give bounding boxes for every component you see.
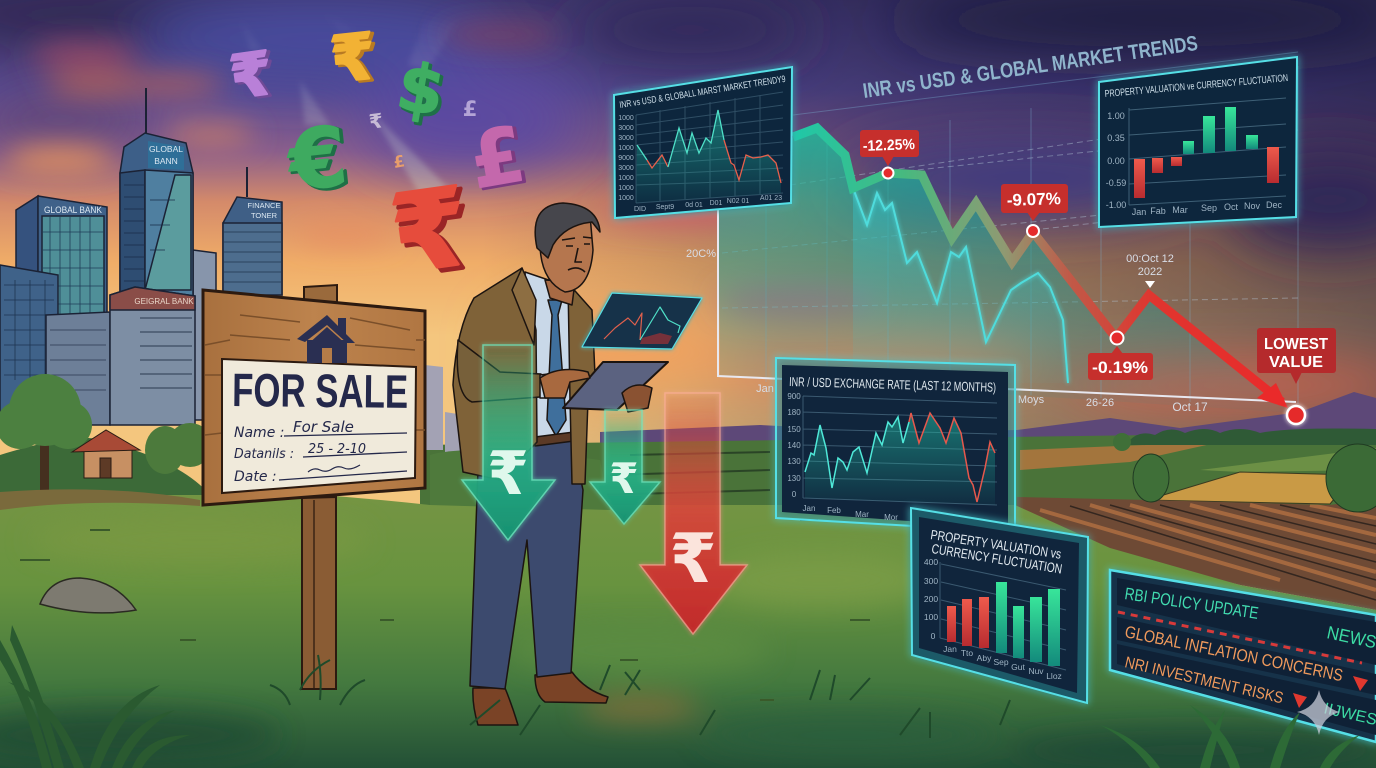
face — [540, 215, 593, 292]
hair — [535, 203, 600, 258]
arrow: small green rupee: ₹ — [609, 454, 639, 503]
trousers — [470, 438, 583, 689]
distant tree line — [1130, 428, 1376, 445]
axis labels: Sep — [993, 657, 1009, 667]
dollar: $ — [394, 50, 453, 134]
tick labels: DID — [634, 206, 646, 213]
grid — [1129, 98, 1286, 205]
tick labels: 0d 01 — [685, 202, 703, 209]
tick labels: 9000 — [618, 155, 634, 162]
axis labels: 130 — [787, 474, 801, 483]
hologram mini chart — [582, 293, 702, 349]
for sale sign — [203, 285, 425, 689]
axis labels: Mor — [884, 513, 898, 522]
foreground grass blades — [0, 625, 1360, 768]
axis labels — [686, 248, 1208, 414]
building: finance tower — [223, 167, 282, 295]
tick labels: D01 — [710, 200, 723, 207]
panel: INR/USD exchange rate — [776, 358, 1015, 532]
panel title: PROPERTY VALUATION vs — [930, 527, 1062, 562]
panel title: INR / USD EXCHANGE RATE (LAST 12 MONTHS) — [789, 374, 996, 395]
axis labels: Jan — [803, 504, 815, 513]
data points — [882, 168, 1305, 424]
icon: sparkle watermark — [1297, 690, 1340, 735]
area — [636, 110, 781, 203]
for sale heading: FOR SALE — [232, 363, 408, 418]
streaks — [240, 10, 458, 195]
tick labels: 1000 — [618, 115, 634, 122]
farm fields — [420, 428, 1376, 613]
panel: property valuation bars — [911, 508, 1088, 703]
field trees — [1133, 454, 1169, 502]
grey back towers — [193, 250, 216, 420]
bars — [1134, 107, 1279, 198]
bars — [947, 582, 1060, 666]
axis labels: Mar — [1172, 205, 1188, 215]
axis labels: -1.00 — [1106, 200, 1126, 210]
buildings skyline — [0, 88, 470, 470]
panel: top-left market trends — [614, 67, 792, 218]
tick labels: 1000 — [618, 185, 634, 192]
tick labels: 1000 — [618, 195, 634, 202]
form fields: Name : — [234, 425, 284, 441]
axis labels: 400 — [924, 557, 938, 567]
distant hills — [600, 392, 1376, 470]
tick labels: Sept9 — [656, 204, 674, 211]
rock — [40, 578, 136, 613]
building: finance tower: FINANCE — [248, 201, 280, 210]
euro: € — [286, 111, 354, 212]
axis labels: 150 — [787, 425, 801, 434]
axis labels: 0.00 — [1107, 156, 1125, 166]
neck — [545, 280, 575, 305]
callout lowest value: VALUE — [1269, 354, 1323, 371]
ticker dashes — [1118, 612, 1362, 663]
grid — [636, 92, 783, 203]
secondary cyan line — [853, 188, 1068, 383]
building: global bank left — [16, 196, 107, 330]
axis labels: Aby — [977, 653, 992, 663]
axis labels: 0 — [931, 631, 936, 641]
axis labels: -0.59 — [1106, 178, 1126, 188]
axis labels: 300 — [924, 576, 938, 586]
panel: property valuation top-right — [1099, 57, 1297, 227]
axis labels: Dec — [1266, 200, 1282, 210]
callout -12.25% — [860, 130, 919, 166]
tablet — [563, 362, 668, 410]
sign post — [304, 285, 337, 312]
axis labels: Fab — [1150, 206, 1166, 216]
arrow: small green rupee — [590, 410, 660, 524]
wood board — [203, 290, 425, 505]
arm — [457, 340, 541, 402]
grid — [766, 52, 1298, 404]
trees and cottage left — [0, 374, 610, 613]
golden field — [1147, 472, 1354, 504]
pound: £ — [466, 111, 534, 207]
pound: £ — [463, 109, 531, 206]
axis labels: 00:Oct 12 — [1126, 253, 1174, 265]
red rupee: ₹ — [384, 164, 476, 299]
arrow: red rupee: ₹ — [669, 520, 717, 599]
building: central tower — [120, 88, 193, 300]
axis labels: Tto — [961, 648, 973, 658]
panel: property valuation bars: CURRENCY FLUCTUATION — [931, 541, 1063, 577]
row: NRI investment — [1117, 644, 1376, 735]
yellow rupee: ₹ — [327, 20, 379, 98]
area — [805, 413, 995, 505]
arrow: large green rupee — [462, 345, 555, 540]
axis labels: 180 — [787, 408, 801, 417]
axis labels: Moys — [1018, 394, 1045, 406]
grid — [803, 396, 997, 505]
axis labels: 130 — [787, 457, 801, 466]
callout lowest value — [1257, 328, 1336, 384]
axes — [718, 200, 1296, 402]
tick labels — [618, 115, 782, 213]
area fills — [718, 128, 1295, 413]
axis labels: 0.35 — [1107, 133, 1125, 143]
cottage — [72, 430, 140, 478]
building: finance tower: TONER — [251, 211, 278, 220]
purple rupee: ₹ — [226, 38, 277, 114]
tick labels: 3000 — [618, 135, 634, 142]
axis labels: 1.00 — [1107, 111, 1125, 121]
falling currency symbols — [226, 10, 534, 303]
tick labels: N02 01 — [727, 198, 749, 205]
axis labels: 200 — [924, 594, 938, 604]
axis labels: Oct — [1224, 202, 1238, 212]
callout -9.07%: -9.07% — [1006, 189, 1061, 210]
small faded symbols: ₹ — [367, 108, 385, 134]
shoes — [473, 688, 518, 725]
main trend line — [793, 128, 1282, 402]
axis labels: Jan — [1132, 207, 1146, 217]
purple rupee: ₹ — [229, 40, 280, 115]
axis labels: Lloz — [1046, 671, 1062, 681]
tick labels: 3000 — [618, 165, 634, 172]
meadow grass — [0, 486, 1376, 768]
panel title: INR vs USD & GLOBALL MARST MARKET TRENDY9 — [619, 74, 786, 111]
callout lowest value: LOWEST — [1264, 336, 1328, 353]
axis labels: Mar — [855, 510, 869, 519]
axis labels: 20C% — [686, 248, 716, 260]
chart title: INR vs USD & GLOBAL MARKET TRENDS — [861, 32, 1199, 103]
yellow rupee: ₹ — [330, 22, 382, 100]
axis labels: Nov — [1244, 201, 1260, 211]
axis labels: 140 — [787, 441, 801, 450]
axis labels: 2022 — [1138, 266, 1162, 278]
shirt and tie — [525, 272, 574, 442]
form fields: For Sale — [293, 418, 354, 436]
tick labels: 3000 — [618, 125, 634, 132]
axis labels: Jan — [943, 644, 957, 654]
building: central tower: BANN — [154, 156, 178, 166]
axis labels: 900 — [787, 392, 801, 401]
axis labels: 100 — [924, 612, 938, 622]
callout -0.19%: -0.19% — [1092, 358, 1148, 377]
tick labels: 1000 — [618, 175, 634, 182]
man with tablet — [453, 203, 702, 725]
hands — [540, 370, 590, 398]
euro: € — [283, 109, 351, 210]
callout -12.25%: -12.25% — [863, 136, 915, 155]
main trend chart — [686, 32, 1336, 424]
panel: news ticker: NRI INVESTMENT RISKS — [1123, 654, 1285, 707]
panel: news ticker — [1110, 570, 1376, 742]
callout -9.07% — [1001, 184, 1068, 221]
panel title: PROPERTY VALUATION ve CURRENCY FLUCTUATION — [1104, 73, 1289, 100]
building: red-band bank: GEIGRAL BANK — [134, 297, 194, 306]
axis labels: Oct 17 — [1172, 400, 1208, 414]
eyes and mouth — [562, 237, 592, 272]
ploughed furrows — [1017, 495, 1376, 613]
row: global inflation — [1117, 617, 1376, 695]
form fields: Date : — [234, 469, 277, 485]
axis labels: 0 — [792, 490, 797, 499]
form fields — [234, 418, 407, 485]
axis labels: Nuv — [1028, 666, 1044, 676]
falling currency symbols: £ — [463, 97, 477, 121]
axis labels: Jan — [756, 383, 774, 395]
line — [637, 145, 647, 160]
axis labels — [1106, 111, 1282, 217]
tick labels: A01 23 — [760, 195, 782, 202]
building: red-band bank — [110, 287, 195, 425]
row: RBI policy — [1117, 578, 1376, 665]
form fields: 25 - 2-10 — [308, 442, 366, 457]
arrow: large green rupee: ₹ — [487, 439, 529, 509]
building: global bank left: GLOBAL BANK — [44, 205, 103, 216]
line — [805, 417, 909, 488]
axis labels: 26-26 — [1086, 397, 1114, 409]
falling currency symbols: £ — [392, 151, 406, 172]
icon: house — [297, 315, 355, 363]
paper notice — [222, 359, 416, 493]
callout -0.19% — [1088, 346, 1153, 380]
axis labels: Gut — [1011, 662, 1025, 672]
building: lower left — [0, 265, 110, 425]
form fields: Datanils : — [234, 447, 294, 462]
tick labels: 1000 — [618, 145, 634, 152]
dollar: $ — [391, 48, 450, 131]
panel: news ticker: RBI POLICY UPDATE — [1123, 584, 1260, 623]
building: central tower: GLOBAL — [149, 144, 183, 154]
arrow: red rupee — [640, 393, 747, 634]
grid — [940, 562, 1066, 670]
arrowhead — [1257, 383, 1288, 408]
axis labels — [787, 392, 898, 522]
panel: news ticker: GLOBAL INFLATION CONCERNS — [1123, 622, 1345, 685]
red rupee: ₹ — [389, 168, 480, 302]
axis labels: Feb — [827, 506, 841, 515]
axis labels: Sep — [1201, 203, 1217, 213]
jacket — [453, 268, 537, 480]
axis labels — [924, 557, 1062, 681]
